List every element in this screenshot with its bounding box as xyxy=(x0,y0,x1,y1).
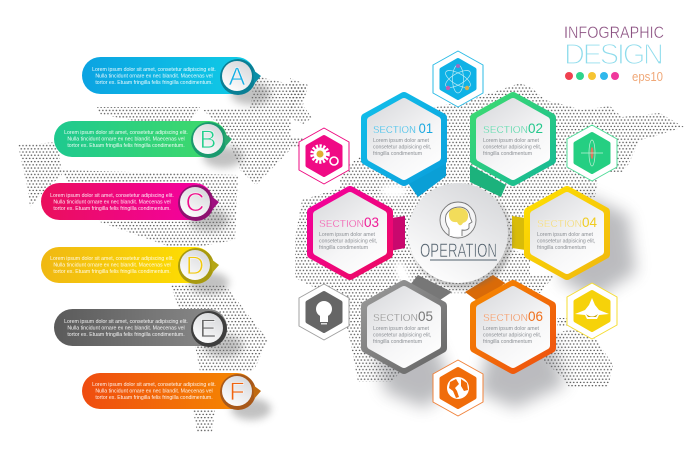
text block: section 03: consetetur adpisicing elit, xyxy=(319,238,377,244)
dotted world map: left half xyxy=(18,76,308,432)
panel: pill D xyxy=(41,247,229,294)
dotted world map: right half xyxy=(290,78,684,388)
text block: section 05: consetetur adpisicing elit, xyxy=(373,332,431,338)
text block: section 01: consetetur adpisicing elit, xyxy=(373,144,431,150)
icon: globe hexagon xyxy=(433,360,483,416)
text block: section 03 xyxy=(319,232,377,251)
text block: section 01: fringilla condimentum xyxy=(373,151,422,157)
panel: section 02 xyxy=(475,97,551,181)
text block: section 06: consetetur adpisicing elit, xyxy=(483,332,541,338)
text block: section 06: Lorem ipsum dolor amet xyxy=(483,326,539,332)
text block: section 05: fringilla condimentum xyxy=(373,339,422,345)
panel: section 04 xyxy=(529,191,605,275)
text block B: Nulla tincidunt ornare ex nec blandit. Maecenas vel xyxy=(67,136,185,142)
heading: section 04: SECTION04 xyxy=(537,214,597,230)
panel: section 06 xyxy=(475,285,551,369)
icon: atom hexagon xyxy=(433,51,483,107)
icon: kayak hexagon xyxy=(567,125,617,181)
panel: pill C xyxy=(41,183,229,231)
text block: section 04: consetetur adpisicing elit, xyxy=(537,238,595,244)
text block: section 01: Lorem ipsum dolor amet xyxy=(373,138,429,144)
panel: section 03 xyxy=(312,191,388,275)
text block: section 02 xyxy=(483,138,541,157)
panel: pill F xyxy=(82,373,271,420)
text block F: Nulla tincidunt ornare ex nec blandit. Maecenas vel xyxy=(95,388,213,394)
text block D: Lorem ipsum dolor sit amet, consetetur adipiscing elit. xyxy=(50,256,174,262)
text block: section 06: fringilla condimentum xyxy=(483,339,532,345)
text block E: Lorem ipsum dolor sit amet, consetetur adipiscing elit. xyxy=(64,319,188,325)
title: DESIGN xyxy=(564,39,664,71)
text block: section 06 xyxy=(483,326,541,345)
panel: section 01 xyxy=(366,97,442,181)
title: INFOGRAPHIC xyxy=(564,24,664,42)
icon: bulb hexagon xyxy=(299,284,349,340)
text block: section 05 xyxy=(373,326,431,345)
letter A: A xyxy=(229,63,246,91)
text block F: tortor ex. Etuam fringilla felis fringilla condimentum. xyxy=(95,395,213,401)
text block: section 02: fringilla condimentum xyxy=(483,151,532,157)
letter C: C xyxy=(186,187,204,217)
text block: section 03: Lorem ipsum dolor amet xyxy=(319,232,375,238)
panel: pill A xyxy=(82,57,271,105)
icon: head with brain xyxy=(440,202,476,238)
text block A: tortor ex. Etuam fringilla felis fringilla condimentum. xyxy=(95,80,213,86)
text block B xyxy=(64,130,188,149)
text block: section 04 xyxy=(537,232,595,251)
text block B: Lorem ipsum dolor sit amet, consetetur adipiscing elit. xyxy=(64,130,188,136)
letter D: D xyxy=(186,252,204,280)
panel: pill B xyxy=(54,121,243,168)
text block: section 05: Lorem ipsum dolor amet xyxy=(373,326,429,332)
text block E: tortor ex. Etuam fringilla felis fringilla condimentum. xyxy=(67,332,185,338)
text block: section 04: fringilla condimentum xyxy=(537,245,586,251)
text block C xyxy=(50,193,174,212)
heading: section 01: SECTION 01 xyxy=(373,120,433,136)
heading: section 03: SECTION03 xyxy=(319,214,379,230)
text block F xyxy=(92,382,216,401)
title xyxy=(564,24,664,84)
text block A: Nulla tincidunt ornare ex nec blandit. Maecenas vel xyxy=(95,74,213,80)
heading: section 02: SECTION02 xyxy=(483,120,543,136)
ribbons connecting sections to centre xyxy=(385,160,532,303)
text block F: Lorem ipsum dolor sit amet, consetetur adipiscing elit. xyxy=(92,382,216,388)
text block C: Lorem ipsum dolor sit amet, consetetur adipiscing elit. xyxy=(50,193,174,199)
centre circle: operation xyxy=(408,183,513,289)
panel: pill E xyxy=(54,309,243,357)
text block E: Nulla tincidunt ornare ex nec blandit. Maecenas vel xyxy=(67,326,185,332)
heading: section 06: SECTION06 xyxy=(483,308,543,324)
letter F: F xyxy=(229,378,245,406)
text block A xyxy=(92,67,216,86)
heading: operation: OPERATION xyxy=(420,241,497,262)
text block: section 02: Lorem ipsum dolor amet xyxy=(483,138,539,144)
title: eps10 xyxy=(632,69,663,84)
text block: section 03: fringilla condimentum xyxy=(319,245,368,251)
panel: section 05 xyxy=(366,285,442,369)
background shadows xyxy=(375,185,636,408)
text block D xyxy=(50,256,174,275)
text block C: Nulla tincidunt ornare ex nec blandit. Maecenas vel xyxy=(53,200,171,206)
text block B: tortor ex. Etuam fringilla felis fringilla condimentum. xyxy=(67,143,185,149)
heading: section 05: SECTION05 xyxy=(373,308,433,324)
icon: plane hexagon xyxy=(567,283,617,339)
icon: gears hexagon xyxy=(299,128,349,184)
text block E xyxy=(64,319,188,338)
text block C: tortor ex. Etuam fringilla felis fringilla condimentum. xyxy=(53,206,171,212)
text block: section 04: Lorem ipsum dolor amet xyxy=(537,232,593,238)
letter B: B xyxy=(200,126,216,154)
text block A: Lorem ipsum dolor sit amet, consetetur adipiscing elit. xyxy=(92,67,216,73)
text block: section 01 xyxy=(373,138,431,157)
letter E: E xyxy=(200,315,216,343)
text block D: tortor ex. Etuam fringilla felis fringilla condimentum. xyxy=(53,269,171,275)
text block: section 02: consetetur adpisicing elit, xyxy=(483,144,541,150)
text block D: Nulla tincidunt ornare ex nec blandit. Maecenas vel xyxy=(53,262,171,268)
